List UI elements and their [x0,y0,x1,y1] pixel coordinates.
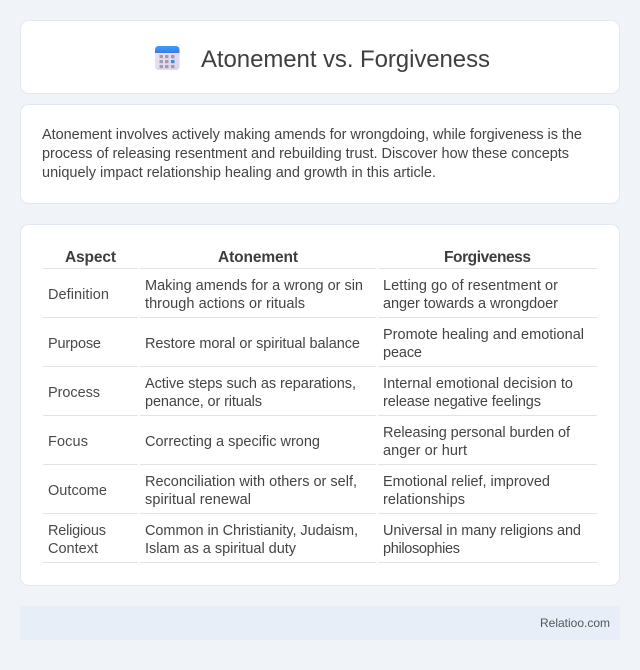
panel: footer [20,606,620,640]
row: process: Process [48,385,100,401]
text block: introduction [42,127,582,181]
row: religious context: Islam as a spiritual duty [145,541,297,557]
panel: header [20,20,620,94]
text block: introduction: Atonement involves actively making amends for wrongdoing, while forgiveness is the [42,127,582,143]
row: definition: Letting go of resentment or [383,278,558,294]
row: outcome [48,474,550,508]
row: purpose: Promote healing and emotional [383,327,584,343]
icon: calendar [155,46,180,70]
text block: introduction: process of releasing resentment and rebuilding trust. Discover how these concepts [42,146,569,162]
row: process: release negative feelings [383,394,541,410]
row: definition: anger towards a wrongdoer [383,296,558,312]
row: outcome: Reconciliation with others or self, [145,474,357,490]
row: definition: Making amends for a wrong or sin [145,278,363,294]
row: definition [48,278,558,312]
row: religious context [48,523,581,557]
row: focus: anger or hurt [383,443,467,459]
title: Atonement vs. Forgiveness [201,46,490,73]
table header: Forgiveness [444,249,531,266]
row: religious context: Common in Christianity, Judaism, [145,523,358,539]
row: definition: Definition [48,287,109,303]
footer attribution: Relatioo.com [540,616,610,630]
row: process: Internal emotional decision to [383,376,573,392]
row: focus: Correcting a specific wrong [145,434,320,450]
row: outcome: Emotional relief, improved [383,474,550,490]
row: process: Active steps such as reparations, [145,376,356,392]
table header [65,249,531,266]
table header: Aspect [65,249,116,266]
row: focus: Focus [48,434,88,450]
row: religious context: Universal in many religions and [383,523,581,539]
table header: Atonement [218,249,298,266]
row: focus [48,425,571,459]
row: process: penance, or rituals [145,394,262,410]
row: outcome: spiritual renewal [145,492,251,508]
row: process [48,376,573,410]
row: outcome: Outcome [48,483,107,499]
row: purpose: Purpose [48,336,101,352]
row: purpose: Restore moral or spiritual balance [145,336,360,352]
row: purpose [48,327,584,361]
row: focus: Releasing personal burden of [383,425,571,441]
row: religious context: philosophies [383,541,460,557]
panel: introduction [20,104,620,204]
row: outcome: relationships [383,492,465,508]
panel: comparison table [20,224,620,586]
text block: introduction: uniquely impact relationship healing and growth in this article. [42,165,436,181]
row: religious context: Context [48,541,98,557]
row: definition: through actions or rituals [145,296,305,312]
row: religious context: Religious [48,523,106,539]
row: purpose: peace [383,345,422,361]
